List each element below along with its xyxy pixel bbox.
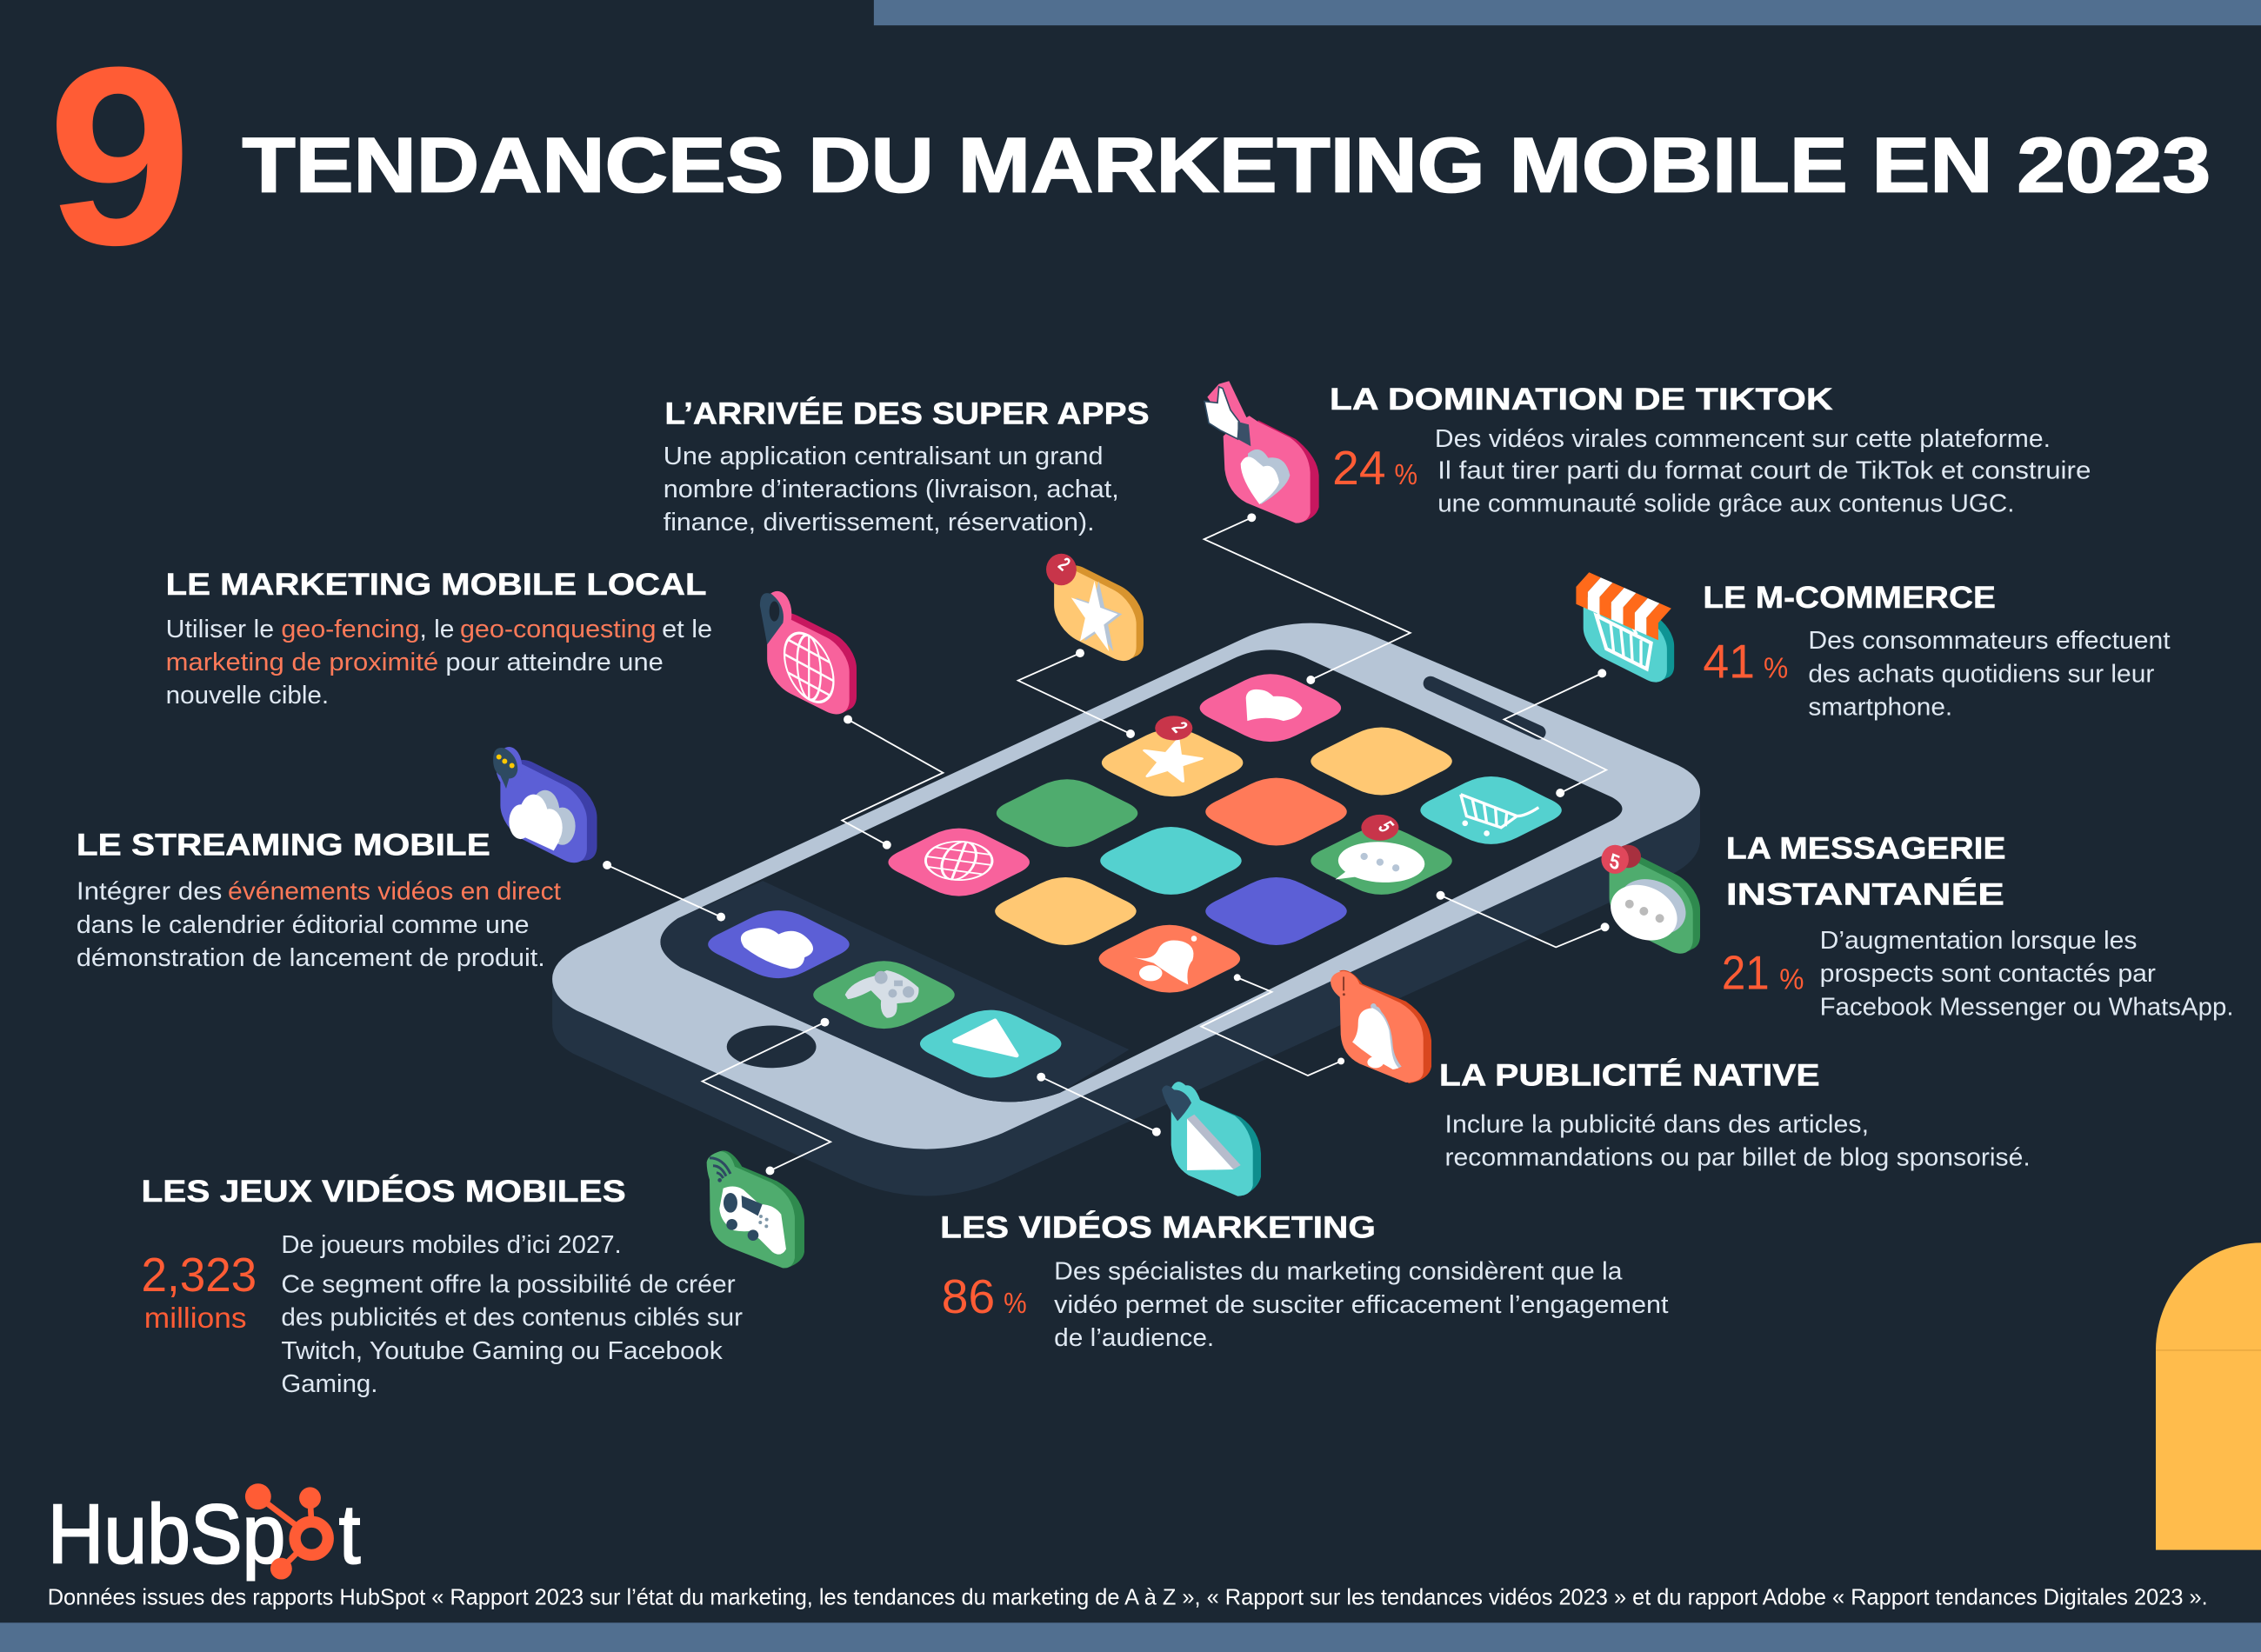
description: smartphone.: [1808, 693, 1952, 721]
heading: LE MARKETING MOBILE LOCAL: [166, 568, 707, 602]
app: star: [1102, 729, 1243, 796]
icon: chat: 5: [1608, 849, 1622, 875]
top bar: [874, 0, 2261, 25]
home button: [727, 1025, 817, 1068]
title: TENDANCES DU MARKETING MOBILE EN 2023: [243, 122, 2211, 209]
description: Une application centralisant un grand: [664, 443, 1104, 470]
description: prospects sont contactés par: [1820, 960, 2156, 988]
icon: cloud: [493, 746, 597, 876]
section: streaming: [77, 828, 561, 972]
decorative yellow shape: [2156, 1242, 2261, 1550]
badge on star app: 2: [1166, 718, 1192, 736]
connector: vidéos: [1037, 1073, 1161, 1136]
description: de l’audience.: [1054, 1324, 1214, 1352]
dock area: [660, 881, 1129, 1102]
logo: HubSpot: t: [339, 1488, 361, 1581]
app: heart: [1200, 674, 1341, 742]
description: Des spécialistes du marketing considèrent que la: [1054, 1258, 1623, 1286]
section: vidéos marketing: [940, 1210, 1669, 1352]
heading: INSTANTANÉE: [1726, 877, 2004, 912]
stat: millions: [144, 1302, 247, 1335]
description: démonstration de lancement de produit.: [77, 944, 545, 972]
description: De joueurs mobiles d’ici 2027.: [281, 1231, 622, 1259]
badge on chat app: 5: [1372, 818, 1398, 836]
badge on star app: [1155, 716, 1192, 740]
stat: 21: [1722, 946, 1770, 1000]
icon: globe pin: [760, 591, 857, 727]
description: [77, 878, 561, 972]
section: super apps: [664, 396, 1150, 536]
speaker: [1431, 683, 1538, 732]
stat: [942, 1269, 1027, 1323]
section: publicité native: [1439, 1058, 2031, 1172]
app: controller: [813, 961, 955, 1029]
phone side: [552, 790, 1700, 1196]
description: D’augmentation lorsque les: [1820, 927, 2137, 955]
heading: L’ARRIVÉE DES SUPER APPS: [664, 396, 1150, 431]
description: nouvelle cible.: [166, 682, 329, 709]
icon: star: [1046, 553, 1144, 673]
app: cart: [1420, 776, 1562, 844]
stat: [1332, 441, 1417, 495]
app: teal: [1100, 827, 1242, 895]
icon: bell: [1331, 970, 1431, 1083]
app: chat: [1311, 827, 1452, 895]
connector: publicité: [1201, 974, 1344, 1076]
icon: star: 2: [1054, 554, 1074, 576]
app: bell: [1099, 925, 1240, 993]
description: Il faut tirer parti du format court de TikTok et construire: [1437, 457, 2091, 485]
description: , le: [420, 616, 454, 643]
description: vidéo permet de susciter efficacement l’engagement: [1054, 1291, 1669, 1319]
app: yellow: [1311, 728, 1452, 795]
description: [1445, 1111, 2031, 1172]
logo: HubSpot: HubSp: [48, 1488, 285, 1581]
badge on chat app: [1361, 815, 1398, 841]
connector: super apps: [1018, 649, 1135, 738]
connector: streaming: [603, 861, 725, 922]
section: m-commerce: [1703, 581, 2171, 721]
app: green: [997, 779, 1137, 847]
description: une communauté solide grâce aux contenus UGC.: [1437, 490, 2015, 518]
stat: 24: [1332, 441, 1386, 495]
stat: 86: [942, 1269, 995, 1323]
stat: [142, 1248, 257, 1335]
app: globe: [888, 829, 1030, 896]
app: play: [920, 1010, 1061, 1078]
phone body: [552, 623, 1700, 1149]
app: yellow bottom: [995, 877, 1137, 945]
icon: video play: [1162, 1082, 1261, 1196]
heading: LES JEUX VIDÉOS MOBILES: [142, 1174, 626, 1209]
stat: %: [1004, 1288, 1027, 1320]
description: geo-fencing: [281, 616, 420, 643]
heading: LES VIDÉOS MARKETING: [940, 1210, 1376, 1245]
big number nine: 9: [48, 14, 192, 297]
description: geo-conquesting: [460, 616, 656, 643]
stat: %: [1779, 964, 1804, 996]
description: finance, divertissement, réservation).: [664, 509, 1095, 536]
heading: LA MESSAGERIE: [1726, 831, 2006, 865]
description: Intégrer des: [77, 878, 222, 906]
description: Des consommateurs effectuent: [1808, 627, 2171, 655]
connector: messagerie: [1437, 891, 1610, 947]
description: et le: [662, 616, 712, 643]
description: nombre d’interactions (livraison, achat,: [664, 476, 1119, 503]
description: [1808, 627, 2171, 721]
description: [1820, 927, 2234, 1021]
description: Twitch, Youtube Gaming ou Facebook: [281, 1337, 723, 1365]
stat: [1703, 634, 1788, 688]
app: orange: [1205, 778, 1347, 846]
stat: %: [1394, 459, 1417, 491]
description: pour atteindre une: [445, 649, 664, 676]
stat: 41: [1703, 634, 1755, 688]
description: Inclure la publicité dans des articles,: [1445, 1111, 1869, 1139]
section: jeux vidéos: [142, 1174, 743, 1398]
stat: %: [1764, 652, 1788, 684]
description: des achats quotidiens sur leur: [1808, 660, 2155, 688]
connector: m-commerce: [1504, 669, 1606, 797]
section: TikTok: [1330, 383, 2091, 518]
description: Utiliser le: [166, 616, 274, 643]
footer source note: Données issues des rapports HubSpot « Rapport 2023 sur l’état du marketing, les tendances du marketing de A à Z », « Rapport sur les tendances vidéos 2023 » et du rapport Adobe « Rapport tendances Digitales 2023 ».: [48, 1586, 2208, 1610]
app: cloud: [708, 910, 850, 978]
heading: LE M-COMMERCE: [1703, 581, 1996, 615]
stat: [1722, 946, 1804, 1000]
section: messagerie: [1722, 831, 2234, 1021]
stat: 2,323: [142, 1248, 257, 1302]
heading: [1726, 831, 2006, 912]
description: [1435, 425, 2091, 518]
description: Des vidéos virales commencent sur cette plateforme.: [1435, 425, 2051, 453]
description: [166, 616, 712, 709]
heading: LA DOMINATION DE TIKTOK: [1330, 383, 1833, 416]
app: blue: [1205, 877, 1347, 945]
icon: chat: [1601, 842, 1700, 966]
description: [664, 443, 1119, 536]
bottom bar: [0, 1622, 2261, 1652]
description: Gaming.: [281, 1370, 377, 1398]
description: événements vidéos en direct: [228, 878, 561, 906]
phone screen: [660, 649, 1622, 1102]
icon: thumbs up heart: [1204, 381, 1319, 523]
description: [1054, 1258, 1669, 1352]
icon: basket shop: [1576, 572, 1674, 694]
description: marketing de proximité: [166, 649, 438, 676]
description: Facebook Messenger ou WhatsApp.: [1820, 993, 2234, 1021]
smartphone illustration: [552, 623, 1700, 1196]
heading: LE STREAMING MOBILE: [77, 828, 490, 862]
section: marketing local: [166, 568, 712, 709]
connector: local: [842, 715, 943, 849]
connector: jeux: [703, 1018, 830, 1175]
description: Ce segment offre la possibilité de créer: [281, 1271, 736, 1299]
description: recommandations ou par billet de blog sponsorisé.: [1445, 1144, 2031, 1172]
description: dans le calendrier éditorial comme une: [77, 911, 530, 939]
connector: TikTok: [1204, 513, 1411, 684]
heading: LA PUBLICITÉ NATIVE: [1439, 1058, 1820, 1093]
description: [281, 1231, 743, 1398]
description: des publicités et des contenus ciblés sur: [281, 1304, 743, 1332]
icon: game controller: [707, 1150, 804, 1268]
